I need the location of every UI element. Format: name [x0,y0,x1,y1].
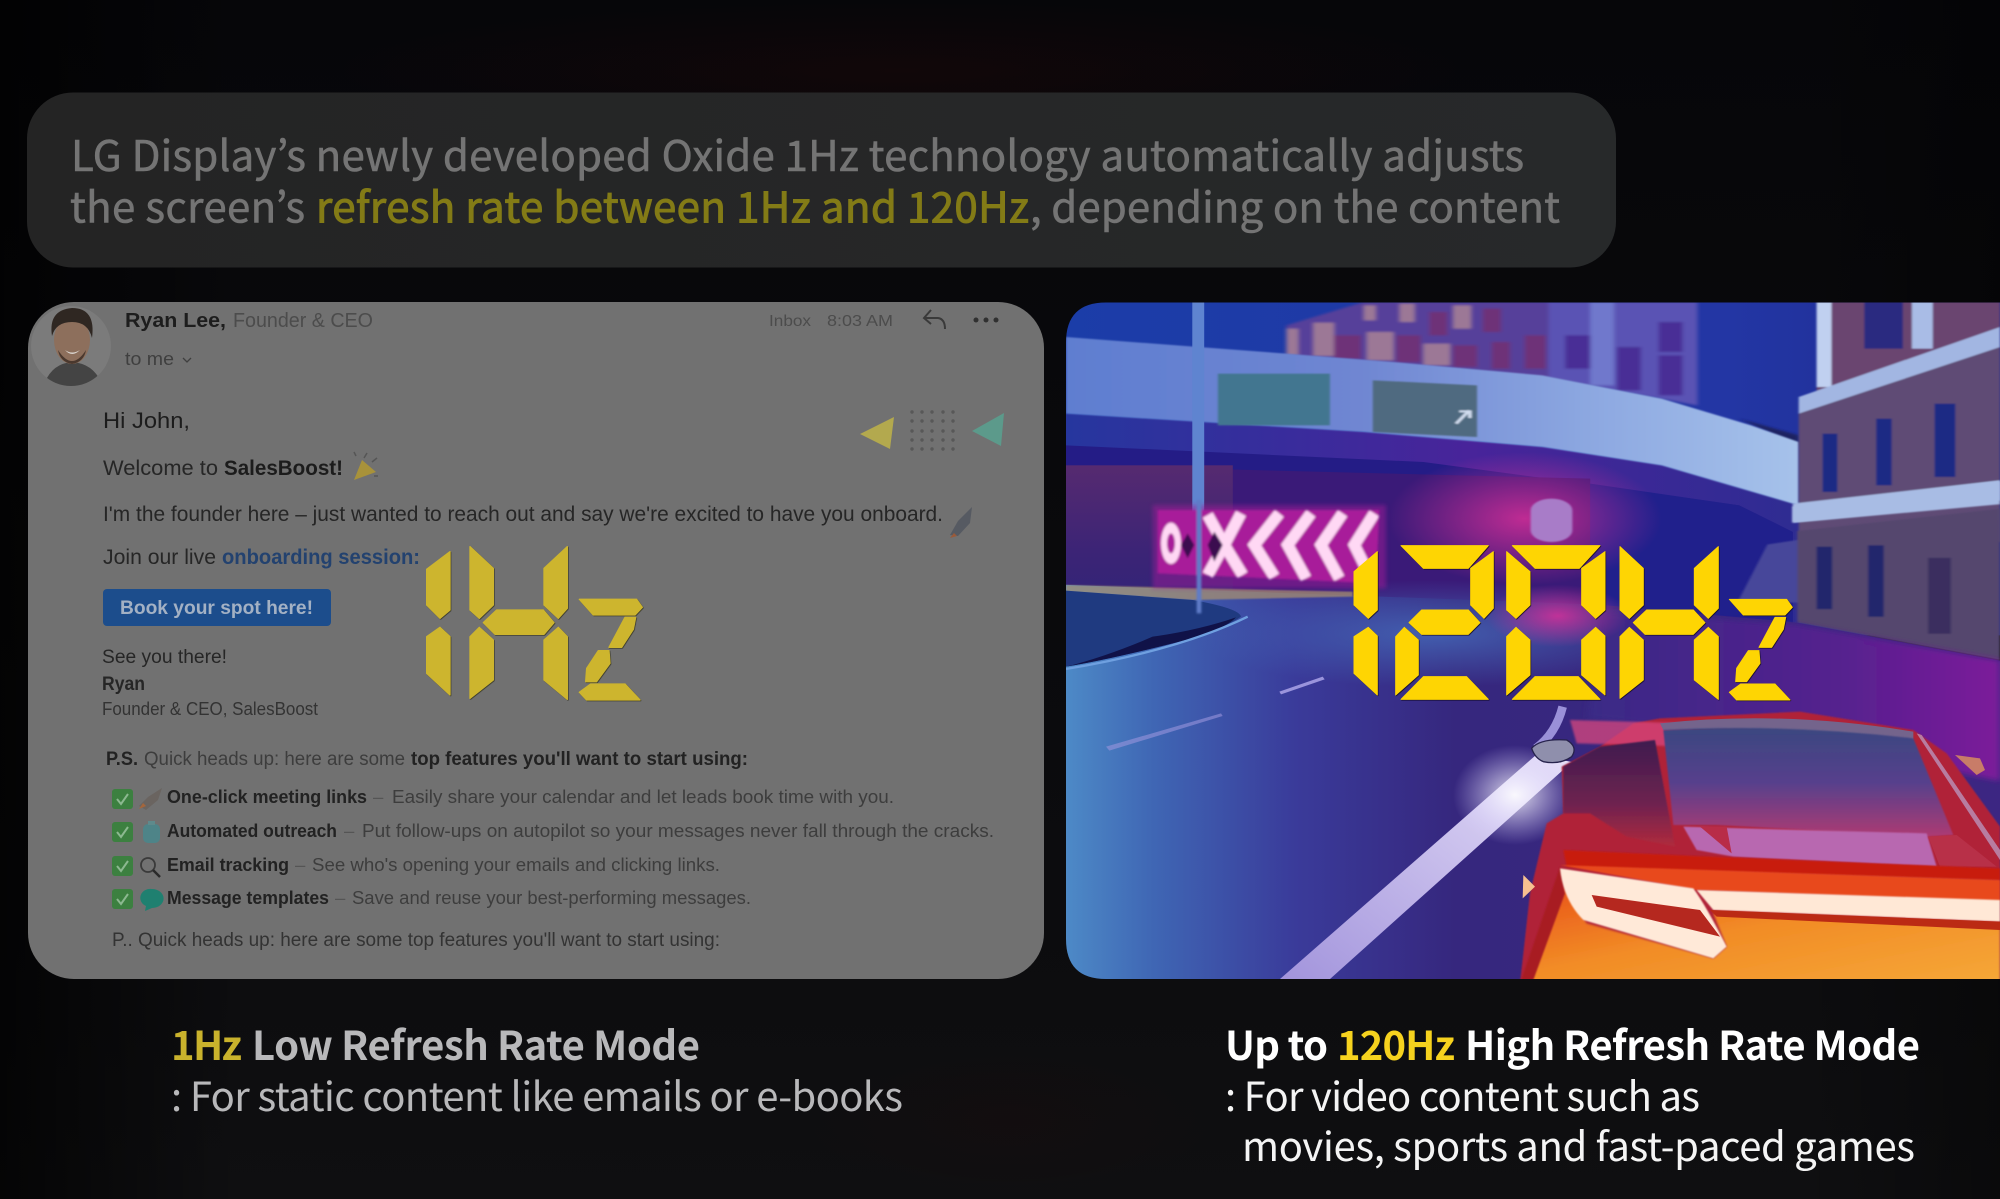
feature icons [139,788,164,911]
scene: street surface [1060,585,2000,1004]
P.S. line: P.S. [106,749,138,770]
caption: 120Hz high refresh rate mode [1225,1014,1920,1173]
scene: chevron sign glow [1153,505,1386,588]
caption body right: : For video content such as [1225,1065,1700,1123]
car: right pillar [1928,835,1997,867]
email header: Ryan Lee, [125,309,226,332]
car: taillight band [1697,890,2000,922]
email body text: Hi John, [103,408,190,433]
scene: sky [1060,302,2000,635]
car: spoiler band [1563,850,2000,880]
P.S. line [106,749,748,770]
email body text: Welcome to [103,457,218,480]
car: mirror [1532,740,1574,763]
scene: distant buildings [1286,302,1799,445]
caption body left: : For static content like emails or e-books [171,1065,903,1123]
email header: 8:03 AM [827,313,893,330]
feature 4: – [335,887,346,908]
email signature: See you there! [102,647,227,668]
feature 3: See who's opening your emails and clicking links. [312,854,720,875]
scene: right building upper [1793,302,2000,542]
caption body right: movies, sports and fast-paced games [1242,1115,1915,1173]
email body text: SalesBoost! [224,457,343,480]
car: window reflection [1683,827,1937,867]
car: pink reflection [1570,720,1693,747]
feature 2: – [344,820,355,841]
feature 1: Easily share your calendar and let leads book time with you. [392,786,894,807]
email signature: Founder & CEO, SalesBoost [102,699,318,719]
email body text: onboarding session: [222,546,420,569]
button: book your spot: Book your spot here! [120,598,313,619]
scene: tunnel glow [1396,456,1654,581]
car: side marker [1523,875,1535,898]
caption heading left: Low Refresh Rate Mode [252,1014,700,1072]
email body text: Join our live [103,546,216,569]
scene: road signs [1218,374,1477,437]
scene: overpass underside [1066,414,1799,635]
email signature [102,647,318,719]
feature 1: – [373,786,384,807]
icon: reply arrow [924,310,945,329]
caption heading right [1225,1014,1920,1072]
car: rear window [1663,728,1953,837]
scene: lane dashes [1106,677,1325,751]
1Hz digital readout [427,547,642,700]
feature 1 [167,786,894,807]
button: book your spot [103,589,331,626]
caption heading left: 1Hz [171,1014,242,1072]
email body text: I'm the founder here – just wanted to reach out and say we're excited to have you onboard. [103,503,943,526]
scene: right building lower [1737,481,2000,661]
repeated P. line: P.. Quick heads up: here are some top features you'll want to start using: [112,930,720,951]
email header [125,309,893,369]
headline line 2: refresh rate between 1Hz and 120Hz [316,174,1029,236]
car: taillight left [1560,868,1727,958]
feature 1: One-click meeting links [167,786,367,807]
icon: more dots [974,318,998,322]
headline line 1: LG Display’s newly developed Oxide 1Hz technology automatically adjusts [71,123,1524,184]
panel: headline banner [27,92,1616,268]
scene: car [1520,712,2000,983]
scene: pavement island [1066,591,1241,667]
car: side window [1563,740,1675,847]
caption: 1Hz low refresh rate mode [171,1014,903,1123]
email header: Founder & CEO [233,310,373,332]
car: lower body [1523,887,2000,983]
scene: upper city [1060,302,2000,635]
email header: Inbox [769,313,811,330]
feature 2: Put follow-ups on autopilot so your messages never fall through the cracks. [362,820,994,841]
scene: road white line [1280,755,1572,979]
car: silhouette [1520,712,2000,983]
feature 4: Message templates [167,887,329,908]
scene: lower street [1060,481,2000,1004]
panel: email screenshot (1Hz) [28,302,1044,979]
scene: street light pole [1192,302,1204,542]
scene: road curve [1536,707,1563,748]
icon: party popper [354,452,378,480]
caption heading right: Up to [1225,1014,1328,1072]
email signature: Ryan [102,674,145,695]
scene: overpass wall [1066,337,1799,505]
caption body right [1225,1065,1915,1173]
scene: chevron sign [1158,500,1379,613]
scene: street details [1066,500,1563,751]
feature list [112,786,994,911]
120Hz digital readout [1354,546,1792,700]
P.S. line: Quick heads up: here are some [144,749,405,770]
caption heading right: High Refresh Rate Mode [1465,1014,1920,1072]
feature 2: Automated outreach [167,820,337,841]
scene: tan kerb line [1066,585,1353,600]
email header: to me [125,349,174,369]
scene: headlight glow [1456,748,1563,842]
P.S. line: top features you'll want to start using: [411,749,748,770]
feature 4 [167,887,751,908]
icon: rocket [950,507,972,538]
feature 4: Save and reuse your best-performing messages. [352,887,751,908]
headline line 2: the screen’s [70,174,305,236]
email body text [103,408,943,569]
headline line 2: , depending on the content [1030,174,1560,236]
panel: racing game scene (120Hz) [1060,302,2000,1004]
icon: sender avatar [31,306,111,392]
checkbox icons [112,789,133,909]
caption heading right: 120Hz [1337,1014,1455,1072]
feature 3: – [295,854,306,875]
email decoration [860,410,1004,451]
feature 3: Email tracking [167,854,289,875]
car: roof strip [1660,718,1913,740]
headline line 2 [70,174,1560,236]
